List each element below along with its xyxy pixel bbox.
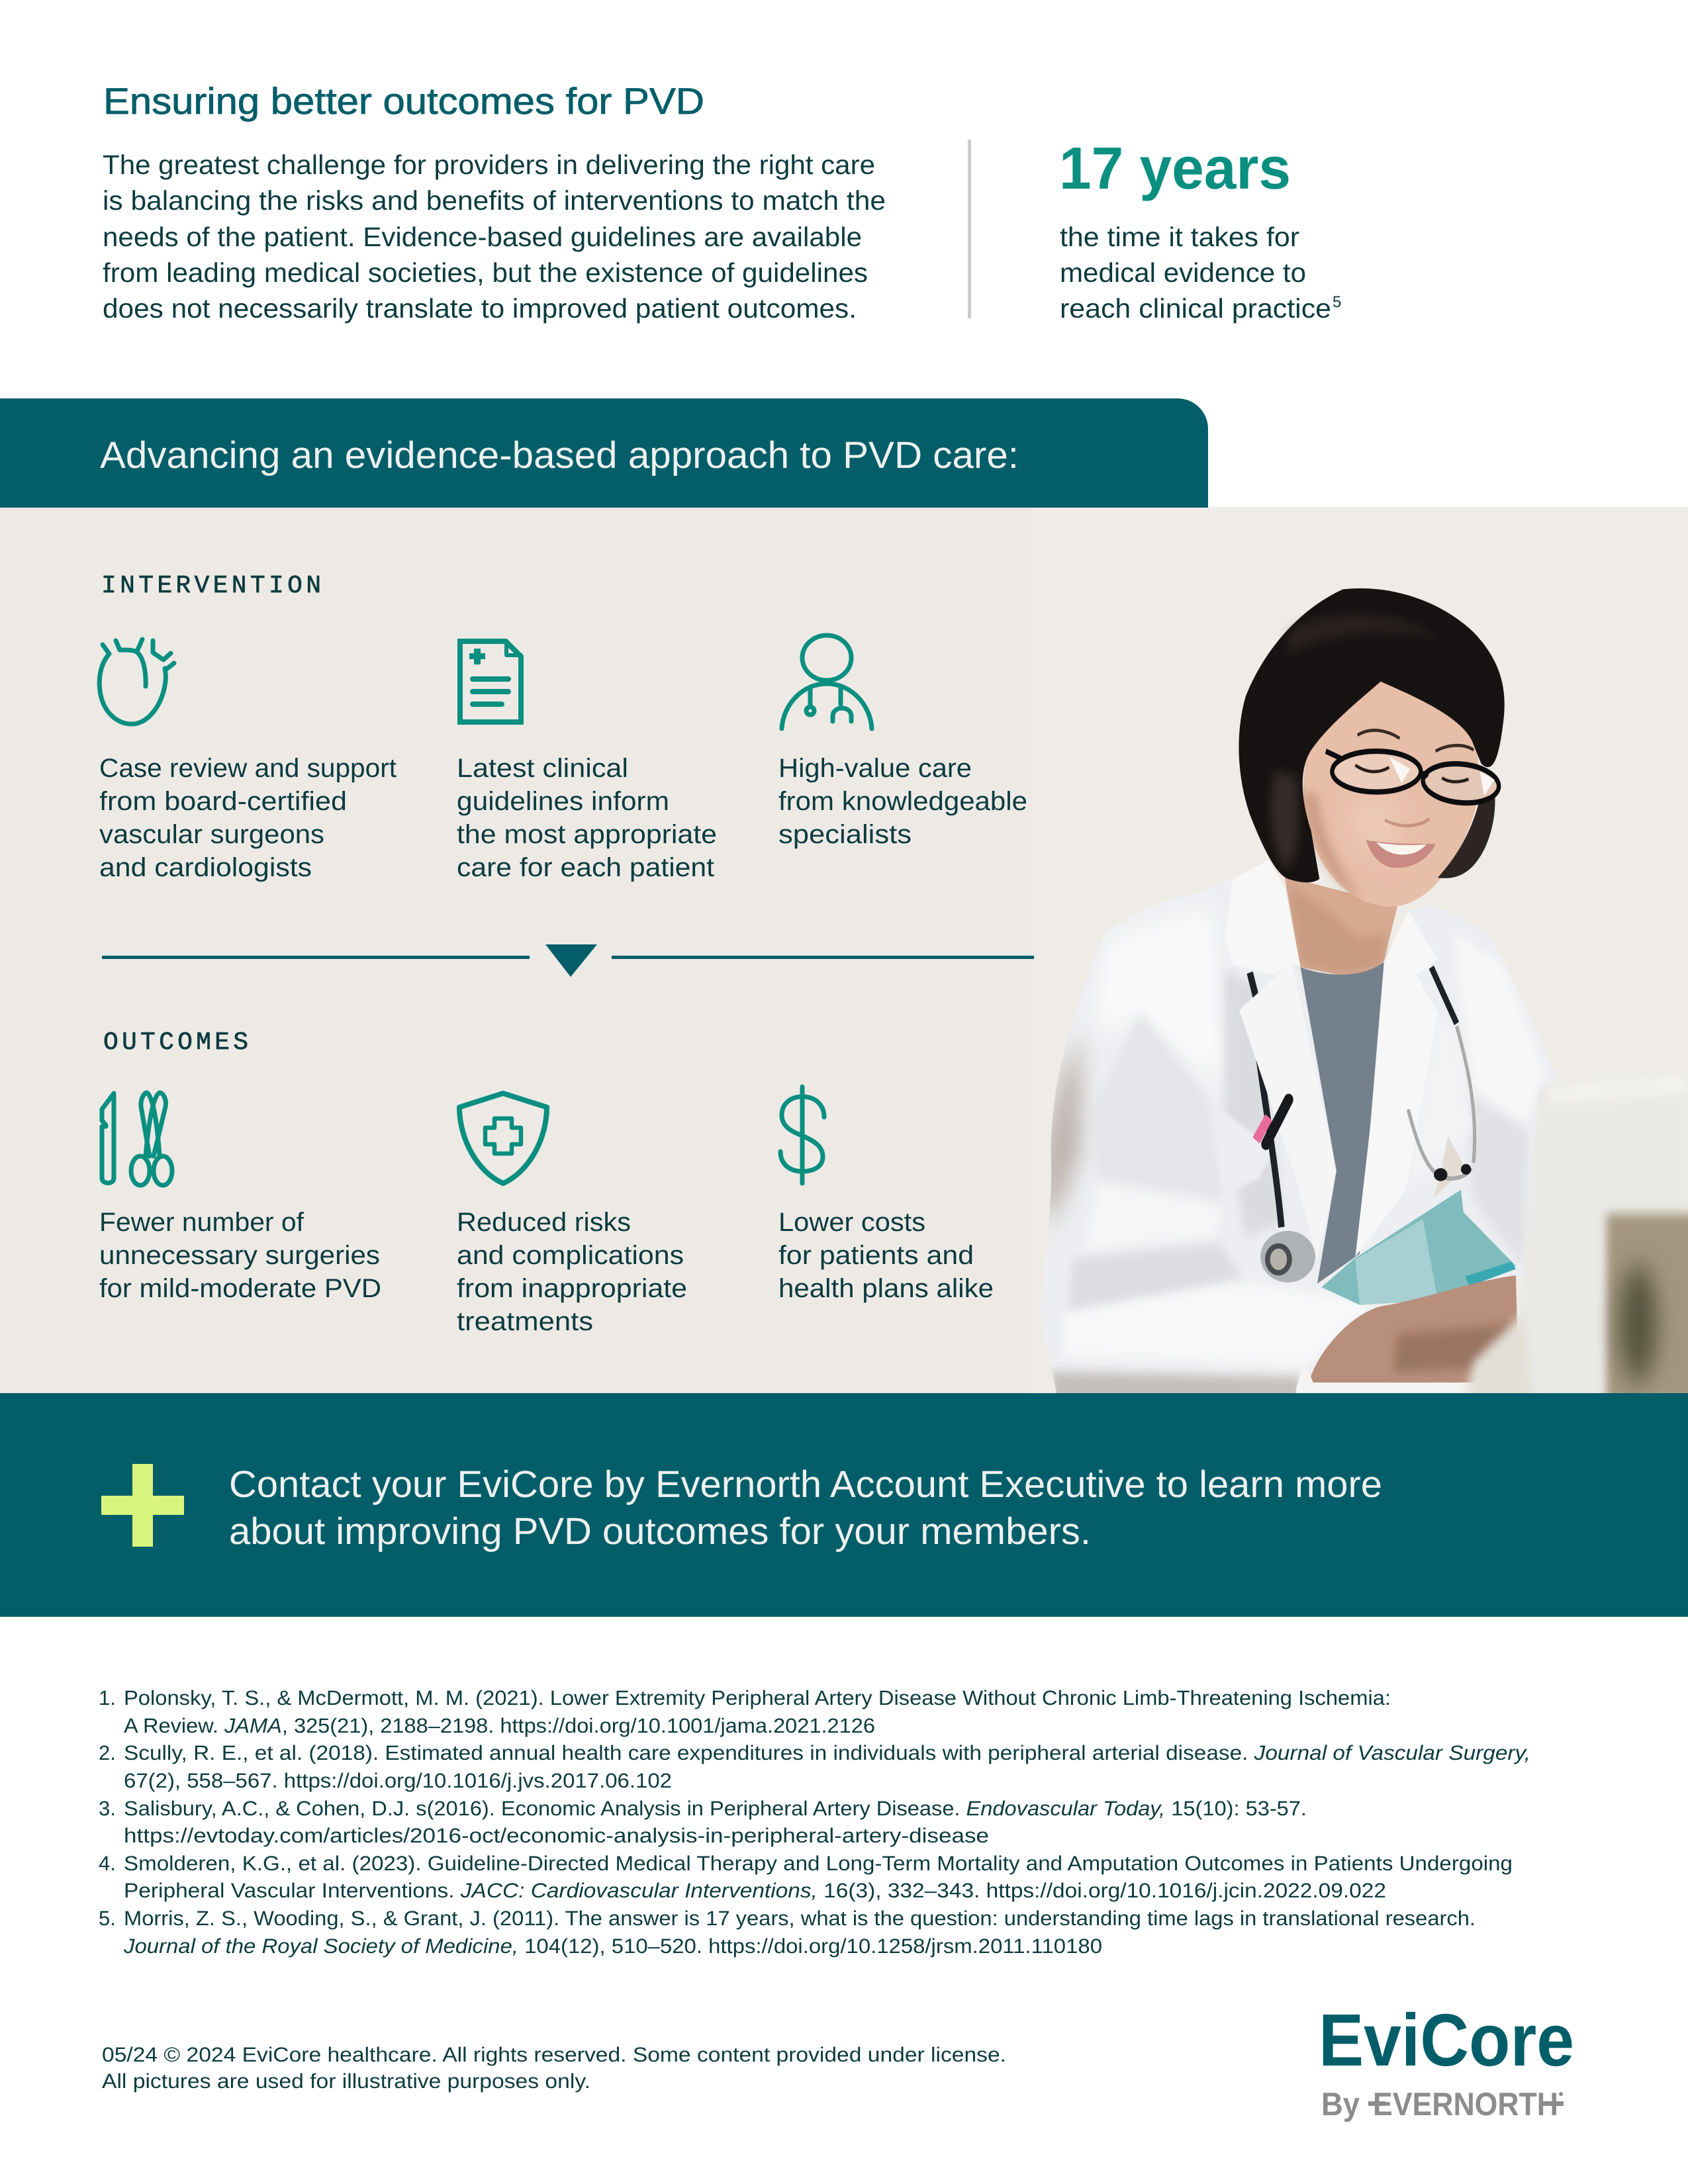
text block: intro paragraph: needs of the patient. Evidence-based guidelines are available [103,222,862,252]
section label: intervention: INTERVENTION [101,572,321,600]
stat description [1060,222,1341,324]
stethoscope chest piece [1260,1231,1315,1283]
footer legal text: All pictures are used for illustrative purposes only. [102,2070,590,2093]
call to action text: Contact your EviCore by Evernorth Account Executive to learn more [229,1463,1382,1506]
stethoscope right tube [1431,967,1457,1024]
references list: 1. [99,1686,116,1709]
arrow: down triangle [545,944,597,977]
call to action text [229,1463,1382,1553]
hair [1239,588,1505,882]
background gap behind arm [1423,1099,1491,1227]
section label: outcomes: OUTCOMES [103,1028,248,1057]
references list: 3. [99,1797,116,1820]
panel: light background [0,507,1688,1394]
glasses [1326,751,1500,806]
text: latest clinical guidelines: care for each patient [457,853,714,882]
text: case review: vascular surgeons [99,820,324,849]
call to action text: about improving PVD outcomes for your members. [229,1510,1091,1553]
photo: smiling doctor at laptop [1039,588,1688,1404]
text: lower costs: Lower costs [778,1208,925,1237]
footer legal text [102,2043,1006,2093]
icon: dollar sign [780,1087,824,1183]
text: fewer surgeries [99,1208,381,1303]
text block: intro paragraph: from leading medical societies, but the existence of guidelines [103,257,868,288]
text: high-value care: from knowledgeable [778,787,1027,816]
references list: Journal of the Royal Society of Medicine, 104(12), 510–520. https://doi.org/10.1258/jrsm.2011.110180 [123,1934,1102,1958]
laptop [1511,1071,1688,1398]
text: high-value care: High-value care [778,754,972,783]
icon: scalpel and scissors [102,1093,172,1185]
lapel right [1355,911,1438,1257]
text: fewer surgeries: Fewer number of [99,1208,305,1237]
banner tab: Advancing an evidence-based approach [0,398,1208,508]
footer legal text: 05/24 © 2024 EviCore healthcare. All rights reserved. Some content provided under license. [102,2043,1006,2066]
references list: Scully, R. E., et al. (2018). Estimated annual health care expenditures in individuals with peripheral arterial disease. Journal of Vascular Surgery, [124,1741,1530,1764]
stat description: the time it takes for [1060,222,1299,252]
smile [1366,819,1436,868]
teal clipboard [1321,1190,1516,1305]
references list: Morris, Z. S., Wooding, S., & Grant, J. (2011). The answer is 17 years, what is the question: understanding time lags in translational research. [124,1907,1476,1930]
text: reduced risks: from inappropriate [457,1274,687,1303]
text: high-value care [778,754,1027,849]
text: case review: Case review and support [99,754,397,783]
banner tab: Advancing an evidence-based approach: Advancing an evidence-based approach to PVD care: [100,434,1019,477]
text block: intro paragraph: The greatest challenge for providers in delivering the right care [103,150,875,180]
text: latest clinical guidelines: guidelines inform [457,787,669,816]
references list: https://evtoday.com/articles/2016-oct/economic-analysis-in-peripheral-artery-disease [124,1824,989,1847]
coat shading [1039,905,1545,1404]
references list: Salisbury, A.C., & Cohen, D.J. s(2016). Economic Analysis in Peripheral Artery Disease. Endovascular Today, 15(10): 53-57. [124,1797,1307,1820]
text: fewer surgeries: unnecessary surgeries [99,1241,380,1270]
logo: EviCore by Evernorth: EVERNORTH [1373,2087,1558,2122]
references list [99,1686,1530,1958]
hand [1309,1275,1518,1383]
coat body [1041,860,1556,1398]
references list: Polonsky, T. S., & McDermott, M. M. (2021). Lower Extremity Peripheral Artery Disease Without Chronic Limb-Threatening Ischemia: [124,1686,1391,1709]
text block: intro paragraph: is balancing the risks and benefits of interventions to match the [103,185,886,216]
stethoscope left tube [1250,973,1282,1227]
text: case review: and cardiologists [99,853,312,882]
icon: heart [99,639,174,724]
stat description: medical evidence to [1060,257,1306,288]
icon: doctor with stethoscope [782,635,872,729]
logo: EviCore by Evernorth: By [1321,2087,1360,2122]
text: fewer surgeries: for mild-moderate PVD [99,1274,381,1303]
logo: EviCore by Evernorth: EviCore [1319,1999,1574,2081]
text block: intro paragraph [103,150,886,324]
blurred object at laptop screen [1607,1214,1688,1401]
collar left [1225,860,1301,976]
neck [1284,876,1397,976]
icon: clinical document [460,640,522,722]
text: reduced risks: Reduced risks [457,1208,631,1237]
callout: 17 years statistic [1059,136,1341,324]
face [1303,675,1479,907]
icon: plus [101,1464,184,1547]
references list: A Review. JAMA, 325(21), 2188–2198. https://doi.org/10.1001/jama.2021.2126 [124,1714,875,1737]
stat number: 17 years [1059,136,1291,202]
call to action band [0,1393,1688,1617]
pen in pocket [1266,1100,1289,1144]
references list: 4. [99,1852,116,1875]
references list: 5. [99,1907,116,1930]
text: high-value care: specialists [778,820,912,849]
icon: shield with cross [459,1093,547,1183]
stat description: reach clinical practice [1060,293,1331,324]
logo: EviCore by Evernorth [1319,1999,1574,2122]
text: latest clinical guidelines: the most appropriate [457,820,717,849]
references list: 2. [99,1741,116,1764]
references list: Peripheral Vascular Interventions. JACC: Cardiovascular Interventions, 16(3), 332–343. https://doi.org/10.1016/j.jcin.2022.09.022 [124,1879,1386,1902]
text: reduced risks: treatments [457,1307,593,1336]
lapel left [1239,962,1336,1259]
stat description: 5 [1333,293,1341,311]
text: lower costs: health plans alike [778,1274,994,1303]
text: case review: from board-certified [99,787,347,816]
grey shirt [1301,962,1384,1283]
references list: 67(2), 558–567. https://doi.org/10.1016/j.jvs.2017.06.102 [124,1769,672,1792]
divider with down arrow [102,944,1034,977]
gap triangle [1433,1136,1465,1198]
heading: Ensuring better outcomes: Ensuring better outcomes for PVD [103,80,704,122]
text: reduced risks: and complications [457,1241,684,1270]
text: reduced risks [457,1208,687,1336]
text: lower costs [778,1208,994,1303]
eyebrows [1358,730,1474,751]
text: latest clinical guidelines: Latest clinical [457,754,628,783]
text: lower costs: for patients and [778,1241,974,1270]
text: latest clinical guidelines [457,754,717,882]
references list: Smolderen, K.G., et al. (2023). Guideline-Directed Medical Therapy and Long-Term Mortality and Amputation Outcomes in Patients Undergoing [124,1852,1513,1875]
text: case review [99,754,397,882]
text block: intro paragraph: does not necessarily translate to improved patient outcomes. [103,293,857,324]
